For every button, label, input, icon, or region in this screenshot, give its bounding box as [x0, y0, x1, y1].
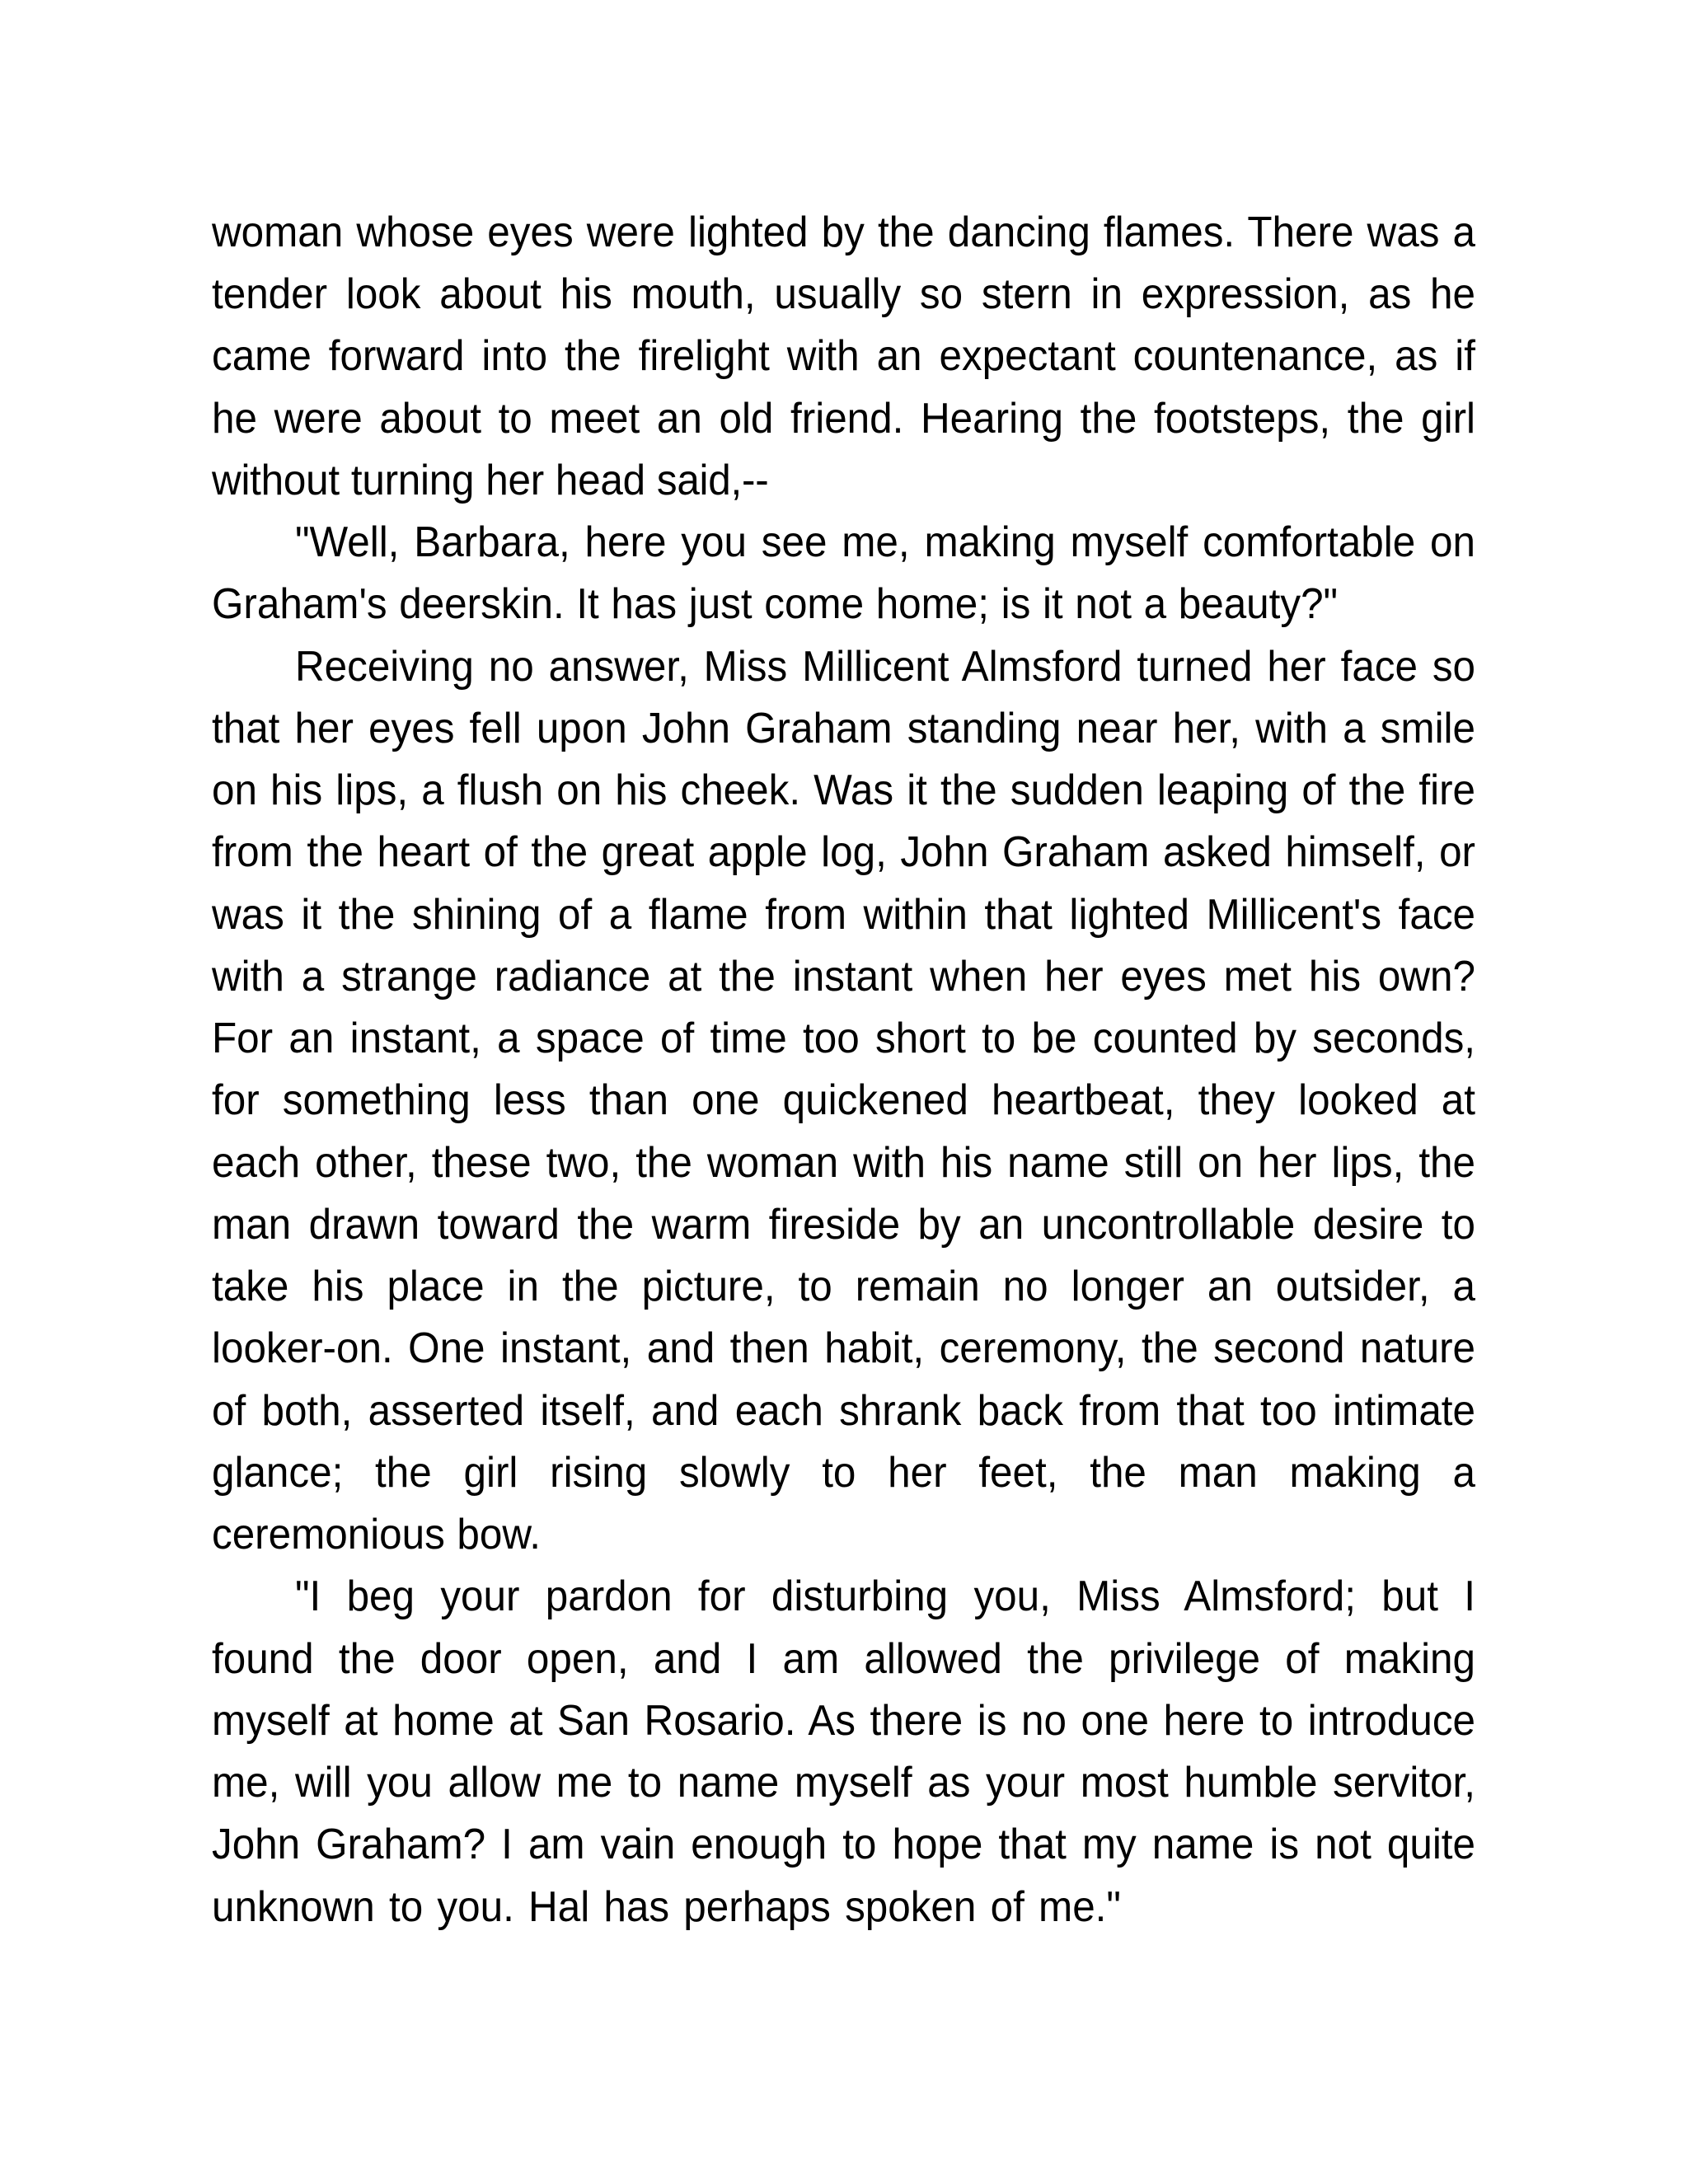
paragraph: Well, Barbara — [212, 518, 1475, 628]
paragraph: woman whose eyes: tender look about his mouth, usually so stern in expression, as he — [212, 270, 1475, 318]
paragraph: woman whose eyes: woman whose eyes were lighted by the dancing flames. There was a — [212, 209, 1475, 256]
text block: page body — [212, 209, 1475, 1931]
paragraph: Receiving no answer: with a strange radiance at the instant when her eyes met his own? — [212, 953, 1475, 1001]
paragraph: I beg your pardon — [212, 1572, 1475, 1931]
paragraph: woman whose eyes — [212, 209, 1475, 504]
paragraph: I beg your pardon: found the door open, and I am allowed the privilege of making — [212, 1635, 1475, 1683]
paragraph: Receiving no answer: ceremonious bow. — [212, 1511, 541, 1558]
paragraph: Receiving no answer: For an instant, a space of time too short to be counted by seconds, — [212, 1015, 1475, 1062]
paragraph: Receiving no answer: on his lips, a flush on his cheek. Was it the sudden leaping of the fire — [212, 766, 1475, 814]
paragraph: Receiving no answer: each other, these two, the woman with his name still on her lips, the — [212, 1139, 1475, 1187]
paragraph: I beg your pardon: me, will you allow me to name myself as your most humble servitor, — [212, 1759, 1475, 1807]
paragraph: Receiving no answer — [212, 643, 1475, 1558]
paragraph: woman whose eyes: without turning her head said,-- — [212, 457, 768, 504]
paragraph: Receiving no answer: Receiving no answer, Miss Millicent Almsford turned her face so — [295, 643, 1475, 691]
paragraph: I beg your pardon: myself at home at San Rosario. As there is no one here to introduce — [212, 1697, 1475, 1745]
paragraph: Receiving no answer: looker-on. One instant, and then habit, ceremony, the second nature — [212, 1324, 1475, 1372]
paragraph: Well, Barbara: Graham's deerskin. It has just come home; is it not a beauty?" — [212, 580, 1338, 628]
paragraph: Well, Barbara: "Well, Barbara, here you see me, making myself comfortable on — [295, 518, 1475, 566]
paragraph: I beg your pardon: unknown to you. Hal has perhaps spoken of me." — [212, 1883, 1121, 1931]
paragraph: Receiving no answer: from the heart of the great apple log, John Graham asked himself, or — [212, 828, 1475, 876]
paragraph: woman whose eyes: he were about to meet an old friend. Hearing the footsteps, the girl — [212, 395, 1475, 443]
paragraph: Receiving no answer: man drawn toward the warm fireside by an uncontrollable desire to — [212, 1201, 1475, 1249]
paragraph: Receiving no answer: of both, asserted itself, and each shrank back from that too intimate — [212, 1387, 1475, 1435]
paragraph: Receiving no answer: that her eyes fell upon John Graham standing near her, with a smile — [212, 705, 1475, 752]
paragraph: Receiving no answer: for something less than one quickened heartbeat, they looked at — [212, 1076, 1475, 1124]
paragraph: Receiving no answer: was it the shining of a flame from within that lighted Millicent's face — [212, 891, 1475, 939]
paragraph: I beg your pardon: John Graham? I am vain enough to hope that my name is not quite — [212, 1821, 1475, 1868]
paragraph: Receiving no answer: take his place in the picture, to remain no longer an outsider, a — [212, 1263, 1475, 1310]
paragraph: I beg your pardon: "I beg your pardon for disturbing you, Miss Almsford; but I — [295, 1572, 1475, 1620]
paragraph: Receiving no answer: glance; the girl rising slowly to her feet, the man making a — [212, 1449, 1475, 1497]
paragraph: woman whose eyes: came forward into the firelight with an expectant countenance, as if — [212, 332, 1475, 380]
